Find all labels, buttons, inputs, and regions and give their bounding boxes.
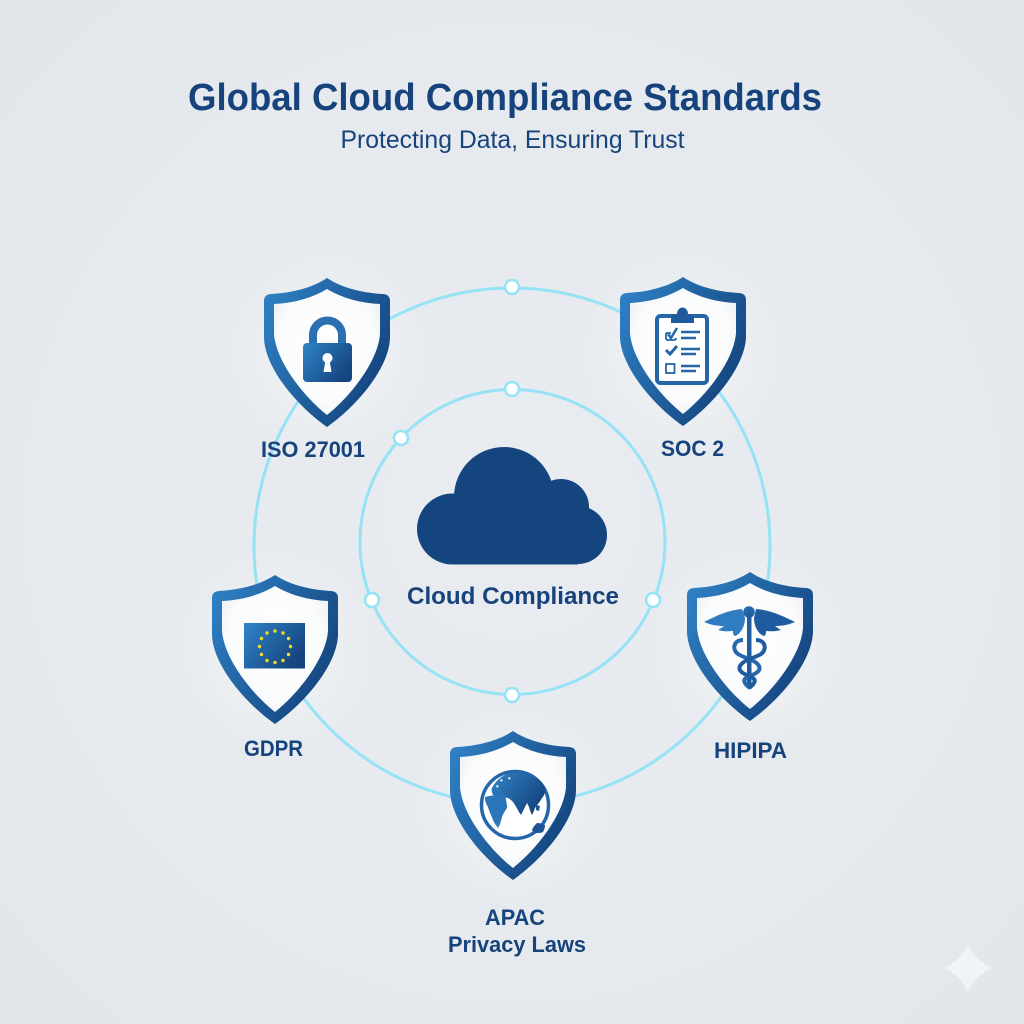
title: Global Cloud Compliance Standards bbox=[188, 77, 822, 119]
icon: caduceus bbox=[704, 606, 795, 688]
icon: EU flag bbox=[244, 623, 305, 668]
central cloud icon bbox=[417, 447, 607, 564]
sparkle mark bbox=[944, 944, 992, 992]
shield bbox=[264, 278, 390, 427]
badge: ISO 27001 bbox=[261, 278, 390, 462]
label: SOC 2 bbox=[661, 436, 724, 461]
icon: padlock bbox=[303, 320, 352, 382]
inner orbit ring bbox=[360, 390, 665, 694]
shield glows bbox=[170, 246, 855, 911]
shield bbox=[687, 572, 813, 721]
shield bbox=[450, 731, 576, 880]
central label: Cloud Compliance bbox=[407, 583, 619, 610]
icon: clipboard checklist bbox=[657, 308, 707, 383]
shield bbox=[620, 277, 746, 426]
label: HIPIPA bbox=[714, 738, 787, 763]
label line 2: Privacy Laws bbox=[448, 932, 586, 957]
badge: SOC 2 bbox=[620, 277, 746, 461]
subtitle: Protecting Data, Ensuring Trust bbox=[340, 126, 685, 154]
badge: HIPIPA bbox=[687, 572, 813, 763]
badge: APAC Privacy Laws bbox=[448, 731, 586, 957]
shield bbox=[212, 575, 338, 724]
label: APAC bbox=[485, 905, 545, 930]
outer orbit ring bbox=[254, 288, 770, 804]
icon: globe bbox=[482, 772, 548, 838]
orbit nodes bbox=[365, 280, 660, 702]
badge: GDPR bbox=[212, 575, 338, 761]
label: GDPR bbox=[244, 736, 303, 761]
label: ISO 27001 bbox=[261, 437, 365, 462]
